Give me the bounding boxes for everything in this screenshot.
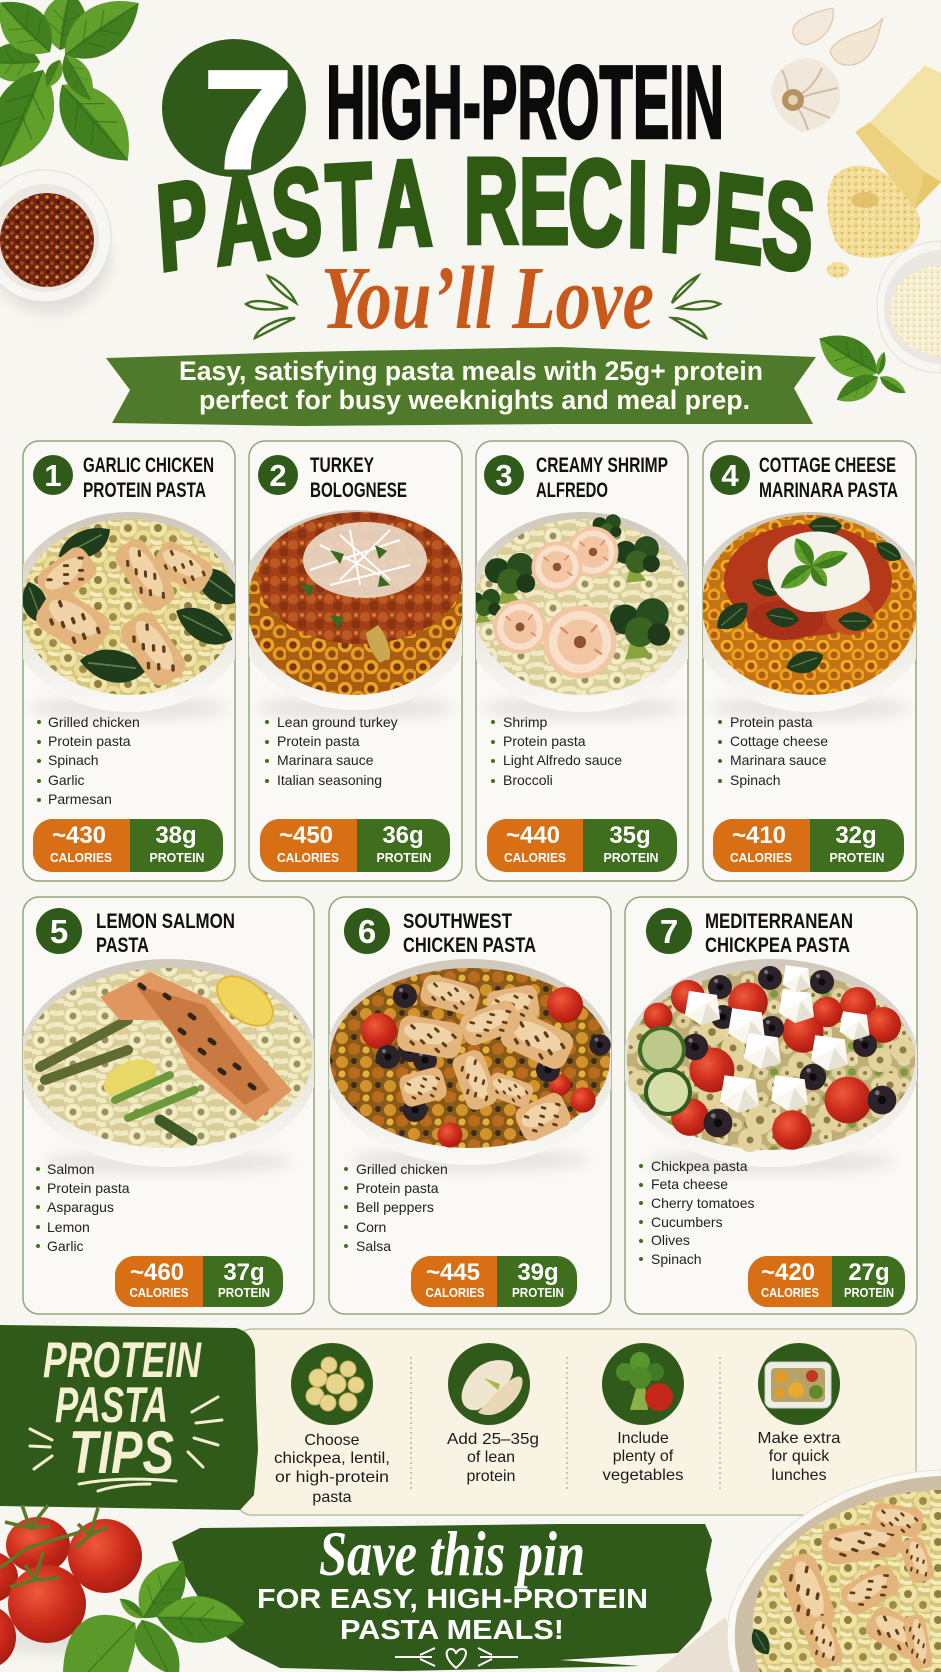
stat pill: calories and protein — [260, 819, 450, 872]
decoration: parmesan wedge and gratings — [827, 65, 941, 278]
recipe title: BOLOGNESE — [310, 479, 407, 502]
recipe title — [310, 454, 407, 502]
number badge — [258, 455, 298, 495]
stat pill: calories and protein: ~450 — [279, 822, 333, 849]
ingredient list: Cottage cheese — [730, 733, 828, 749]
ingredient list: Marinara sauce — [277, 752, 374, 768]
stat pill: calories and protein: CALORIES — [277, 850, 339, 865]
ingredient list: Parmesan — [48, 791, 112, 807]
ingredient list: Lemon — [47, 1219, 90, 1235]
stat pill: calories and protein: 36g — [382, 822, 424, 849]
stat pill: calories and protein: PROTEIN — [150, 850, 204, 865]
ingredient list: Italian seasoning — [277, 772, 382, 788]
recipe title: SOUTHWEST — [403, 910, 512, 933]
stat pill: calories and protein: PROTEIN — [830, 850, 884, 865]
stat pill: calories and protein: ~440 — [506, 822, 560, 849]
stat pill: calories and protein — [748, 1256, 905, 1307]
decoration: basil bottom left — [63, 1549, 246, 1672]
decoration: bowl of chicken pasta bottom right — [727, 1470, 941, 1672]
panel: tips heading brush: PROTEIN — [43, 1332, 202, 1388]
panel: recipe 7 mediterranean chickpea — [623, 897, 919, 1314]
subtitle ribbon banner: Easy, satisfying pasta meals with 25g+ protein — [179, 356, 763, 386]
tip 4: meal prep: Make extra — [758, 1430, 841, 1447]
ingredient list — [344, 1161, 448, 1254]
icon: heart with flourishes — [395, 1648, 518, 1668]
bowl: salmon pasta — [18, 959, 318, 1174]
stat pill: calories and protein: 39g — [517, 1259, 559, 1286]
recipe title — [536, 454, 668, 502]
panel: recipe 4 cottage cheese marinara — [702, 440, 917, 882]
decoration: bowl of grated cheese — [877, 241, 941, 373]
stat pill: calories and protein: 38g — [155, 822, 197, 849]
recipe title: CREAMY SHRIMP — [536, 454, 668, 477]
number badge: 3 — [495, 458, 513, 493]
stat pill: calories and protein: PROTEIN — [844, 1285, 894, 1300]
decoration: napkin — [655, 1617, 745, 1672]
tip 4: meal prep — [758, 1343, 841, 1484]
bowl: southwest chicken — [324, 959, 616, 1172]
ingredient list: Light Alfredo sauce — [503, 752, 622, 768]
ingredient list: Salsa — [356, 1238, 391, 1254]
ingredient list: Protein pasta — [356, 1180, 439, 1196]
tip 4: meal prep: lunches — [771, 1467, 827, 1484]
ingredient list: Asparagus — [47, 1199, 114, 1215]
ingredient list: Lean ground turkey — [277, 714, 398, 730]
ingredient list: Protein pasta — [48, 733, 131, 749]
ingredient list: Protein pasta — [47, 1180, 130, 1196]
ingredient list — [37, 714, 140, 807]
recipe title: MARINARA PASTA — [759, 479, 898, 502]
recipe title: CHICKPEA PASTA — [705, 934, 850, 957]
tip 2: lean protein — [447, 1343, 539, 1485]
bowl: mediterranean chickpea — [623, 959, 919, 1174]
number badge — [646, 908, 692, 954]
recipe title: GARLIC CHICKEN — [83, 454, 214, 477]
stat pill: calories and protein: PROTEIN — [512, 1285, 564, 1300]
recipe title: LEMON SALMON — [96, 910, 235, 933]
stat pill: calories and protein: 35g — [609, 822, 651, 849]
ingredient list: Garlic — [47, 1238, 84, 1254]
ingredient list: Cucumbers — [651, 1214, 723, 1230]
stat pill: calories and protein: PROTEIN — [218, 1285, 270, 1300]
panel: tips strip — [236, 1329, 916, 1515]
recipe title: TURKEY — [310, 454, 374, 477]
tip 4: meal prep: for quick — [769, 1448, 830, 1465]
ingredient list: Corn — [356, 1219, 386, 1235]
number badge — [36, 908, 82, 954]
ingredient list: Spinach — [651, 1251, 702, 1267]
tip 1: choose pasta: chickpea, lentil, — [274, 1450, 390, 1467]
ingredient list: Feta cheese — [651, 1176, 728, 1192]
tip 3: vegetables — [602, 1343, 684, 1484]
recipe title: ALFREDO — [536, 479, 608, 502]
tip 3: vegetables: vegetables — [602, 1467, 684, 1484]
number badge: 6 — [358, 913, 376, 950]
number badge — [33, 455, 73, 495]
ingredient list: Chickpea pasta — [651, 1158, 748, 1174]
subtitle ribbon banner: perfect for busy weeknights and meal prep. — [199, 385, 750, 415]
ingredient list: Spinach — [730, 772, 781, 788]
bowl: shrimp alfredo — [476, 512, 688, 721]
bowl: cottage cheese marinara — [703, 512, 916, 721]
number badge: 1 — [44, 458, 62, 493]
panel: recipe 1 garlic chicken — [22, 440, 236, 882]
tip 3: vegetables: plenty of — [613, 1448, 674, 1465]
number badge: 4 — [721, 458, 739, 493]
number badge — [484, 455, 524, 495]
ingredient list — [265, 714, 398, 788]
ingredient list: Bell peppers — [356, 1199, 434, 1215]
recipe title — [705, 910, 853, 957]
ingredient list: Spinach — [48, 752, 99, 768]
number badge 7: 7 — [203, 41, 293, 198]
ingredient list: Grilled chicken — [356, 1161, 448, 1177]
number badge — [344, 908, 390, 954]
stat pill: calories and protein — [487, 819, 677, 872]
decoration: chili flake bowl — [0, 170, 111, 313]
tip 1: choose pasta — [274, 1343, 390, 1506]
decoration: garlic — [771, 8, 883, 132]
bowl: chicken pasta — [23, 512, 235, 721]
recipe title: PROTEIN PASTA — [83, 479, 206, 502]
panel: recipe 2 turkey bolognese — [248, 440, 463, 882]
decoration: tomatoes — [0, 1505, 142, 1668]
stat pill: calories and protein — [33, 819, 223, 872]
call to action brush banner — [172, 1518, 712, 1671]
recipe title — [83, 454, 214, 502]
number badge 7 — [162, 39, 306, 198]
subtitle ribbon banner — [106, 347, 816, 426]
ingredient list: Garlic — [48, 772, 85, 788]
decoration: basil top left — [0, 0, 152, 179]
ingredient list: Broccoli — [503, 772, 553, 788]
stat pill: calories and protein: CALORIES — [50, 850, 112, 865]
call to action brush banner: PASTA MEALS! — [340, 1614, 564, 1645]
stat pill: calories and protein: CALORIES — [761, 1285, 819, 1300]
call to action brush banner: Save this pin — [319, 1518, 585, 1589]
tip 1: choose pasta: pasta — [312, 1489, 352, 1506]
ingredient list: Salmon — [47, 1161, 94, 1177]
stat pill: calories and protein: CALORIES — [426, 1285, 485, 1300]
stat pill: calories and protein: CALORIES — [130, 1285, 189, 1300]
number badge: 5 — [50, 913, 68, 950]
ingredient list: Shrimp — [503, 714, 548, 730]
tip 1: choose pasta: or high-protein — [275, 1469, 389, 1486]
panel: recipe 3 creamy shrimp alfredo — [475, 440, 689, 882]
recipe title — [96, 910, 235, 957]
ingredient list: Protein pasta — [730, 714, 813, 730]
stat pill: calories and protein: 32g — [835, 822, 877, 849]
script subtitle: You’ll Love — [321, 249, 654, 348]
bowl: turkey bolognese — [249, 510, 462, 721]
stat pill: calories and protein: ~460 — [130, 1259, 184, 1286]
recipe title — [403, 910, 536, 957]
ingredient list — [639, 1158, 754, 1267]
number badge: 7 — [660, 913, 678, 950]
panel: recipe 6 southwest chicken — [324, 897, 616, 1314]
number badge: 2 — [269, 458, 287, 493]
stat pill: calories and protein: ~420 — [761, 1259, 815, 1286]
panel: tips heading brush: TIPS — [69, 1419, 174, 1486]
ingredient list: Protein pasta — [503, 733, 586, 749]
ingredient list: Marinara sauce — [730, 752, 827, 768]
ingredient list: Protein pasta — [277, 733, 360, 749]
stat pill: calories and protein — [411, 1256, 577, 1307]
stat pill: calories and protein: ~430 — [52, 822, 106, 849]
tip 1: choose pasta: Choose — [304, 1432, 360, 1449]
ingredient list — [491, 714, 622, 788]
stat pill: calories and protein: ~410 — [732, 822, 786, 849]
ingredient list: Olives — [651, 1232, 690, 1248]
call to action brush banner: FOR EASY, HIGH-PROTEIN — [257, 1583, 648, 1614]
panel: tips heading brush: PASTA — [55, 1377, 168, 1433]
number badge — [710, 455, 750, 495]
stat pill: calories and protein: CALORIES — [504, 850, 566, 865]
ingredient list: Cherry tomatoes — [651, 1195, 754, 1211]
recipe title: PASTA — [96, 934, 149, 957]
decoration: small basil sprig — [810, 323, 909, 409]
stat pill: calories and protein: 27g — [848, 1259, 890, 1286]
stat pill: calories and protein: CALORIES — [730, 850, 792, 865]
stat pill: calories and protein — [713, 819, 904, 872]
panel: tips heading brush — [0, 1325, 258, 1510]
recipe title — [759, 454, 898, 502]
ingredient list: Grilled chicken — [48, 714, 140, 730]
tip 2: lean protein: Add 25–35g — [447, 1431, 539, 1448]
ingredient list — [718, 714, 828, 788]
stat pill: calories and protein: PROTEIN — [376, 850, 432, 865]
tip 3: vegetables: Include — [617, 1430, 669, 1447]
stat pill: calories and protein: ~445 — [426, 1259, 480, 1286]
ingredient list — [36, 1161, 130, 1254]
panel: recipe 5 lemon salmon — [18, 897, 318, 1314]
tip 2: lean protein: protein — [467, 1468, 515, 1485]
tip 2: lean protein: of lean — [467, 1449, 515, 1466]
title — [153, 0, 820, 348]
recipe title: CHICKEN PASTA — [403, 934, 536, 957]
stat pill: calories and protein: 37g — [223, 1259, 265, 1286]
recipe title: MEDITERRANEAN — [705, 910, 853, 933]
stat pill: calories and protein: PROTEIN — [604, 850, 658, 865]
stat pill: calories and protein — [115, 1256, 283, 1307]
decoration: sprigs beside subtitle — [246, 276, 720, 338]
